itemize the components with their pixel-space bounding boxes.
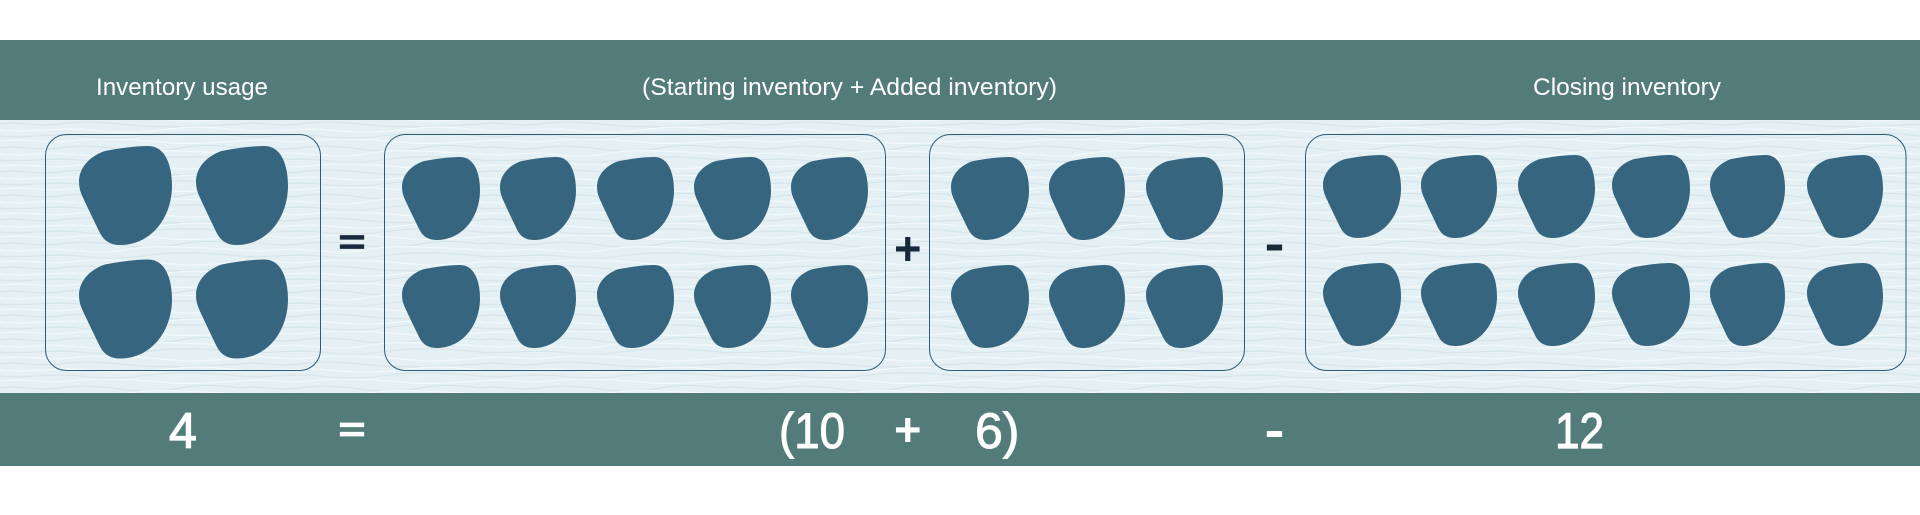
heading: inventory usage: Inventory usage [96,74,268,101]
operator: minus: - [1264,402,1284,458]
header band [0,40,1920,120]
textured middle band [0,120,1920,393]
footer band with numeric formula [0,393,1920,466]
operator: plus: + [894,222,922,274]
operator: equals: = [338,411,366,449]
heading: closing inventory: Closing inventory [1533,74,1722,101]
operator: minus: - [1264,216,1284,272]
number: opening bracket 10: (10 [779,403,845,459]
number: 4: 4 [169,403,197,459]
panel: closing inventory, 12 items [1306,134,1906,370]
operator: equals: = [338,224,366,262]
panel: starting inventory, 10 items [384,134,886,370]
number: 12: 12 [1555,403,1604,459]
operator: plus: + [894,402,922,456]
number: 6 closing bracket: 6) [975,403,1019,459]
panel: inventory usage, 4 items [46,134,320,370]
heading: starting plus added inventory: (Starting inventory + Added inventory) [642,74,1057,101]
panel: added inventory, 6 items [930,134,1244,370]
